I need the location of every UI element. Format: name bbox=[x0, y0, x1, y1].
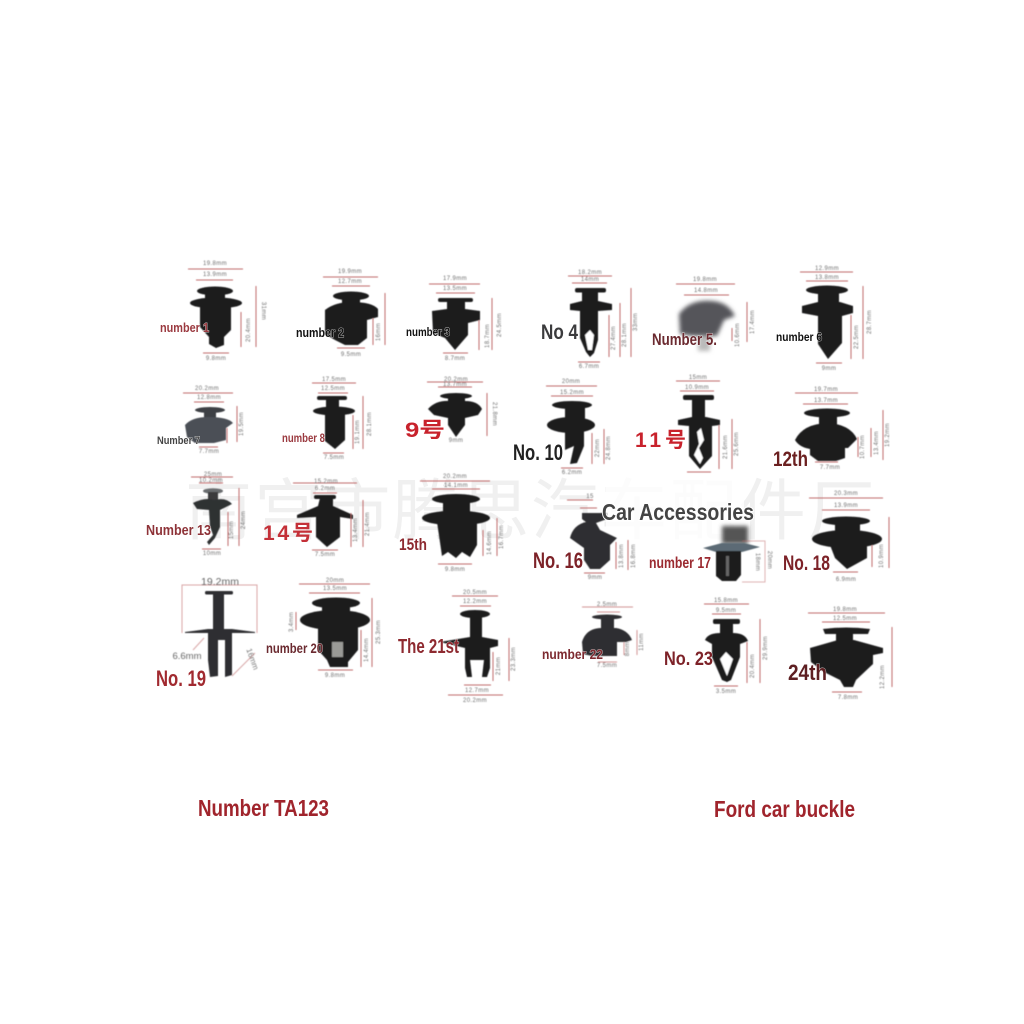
label: Car Accessories: Car Accessories bbox=[602, 499, 754, 525]
clip 20: 25.3mm bbox=[376, 620, 382, 644]
clip 3: 17.9mm bbox=[443, 276, 467, 282]
watermark: 南宫市腾思汽车配件厂 bbox=[185, 474, 875, 549]
clip 21: 20.5mm bbox=[463, 590, 487, 596]
clip 3: 18.7mm bbox=[485, 324, 491, 348]
label: 24th: 24th bbox=[788, 660, 827, 685]
clip 3: 24.5mm bbox=[497, 313, 503, 337]
clip 22 bbox=[542, 602, 645, 669]
clip 7 bbox=[157, 386, 245, 455]
clip 13 bbox=[146, 472, 247, 557]
label: number 2: number 2 bbox=[296, 325, 344, 340]
clip 15: 14.6mm bbox=[487, 531, 493, 555]
clip 3: 8.7mm bbox=[445, 356, 465, 362]
clip 21: 12.7mm bbox=[465, 688, 489, 694]
label: Number 13: Number 13 bbox=[146, 522, 211, 539]
clip 11: 15mm bbox=[689, 375, 707, 381]
clip 2: 19.9mm bbox=[338, 269, 362, 275]
clip 10: 15.2mm bbox=[560, 390, 584, 396]
label: 14号: 14号 bbox=[263, 522, 313, 545]
clip 22: 8mm bbox=[625, 642, 631, 656]
label: No. 16: No. 16 bbox=[533, 548, 583, 573]
clip 24: 12.2mm bbox=[880, 665, 886, 689]
clip 5: 19.8mm bbox=[693, 277, 717, 283]
clip 23: 9.5mm bbox=[716, 608, 736, 614]
clip 12: 10.7mm bbox=[860, 435, 866, 459]
clip 15 bbox=[399, 474, 505, 573]
clip 11: 21.6mm bbox=[723, 435, 729, 459]
clip 19: 16mm bbox=[244, 647, 260, 671]
clip 1: 31mm bbox=[260, 302, 266, 320]
clip 20: 3.4mm bbox=[289, 612, 295, 632]
clip 3 bbox=[406, 276, 503, 362]
clip 14: 7.5mm bbox=[315, 552, 335, 558]
label: number 1: number 1 bbox=[160, 320, 209, 335]
clip 21: 20.2mm bbox=[463, 698, 487, 704]
clip 1: 19.8mm bbox=[203, 261, 227, 267]
clip 18: 6.9mm bbox=[836, 577, 856, 583]
clip 6: 22.5mm bbox=[854, 325, 860, 349]
clip 18: 10.9mm bbox=[879, 544, 885, 568]
clip 5 bbox=[652, 277, 756, 351]
clip 20: 20mm bbox=[326, 578, 344, 584]
label: No. 18: No. 18 bbox=[783, 552, 830, 575]
clip 16: 15 bbox=[586, 494, 594, 500]
clip 11: 25.6mm bbox=[734, 432, 740, 456]
clip 6 bbox=[776, 266, 873, 372]
clip 12 bbox=[773, 387, 891, 471]
clip 24: 12.5mm bbox=[833, 616, 857, 622]
clip 23: 15.8mm bbox=[714, 598, 738, 604]
label: No. 23: No. 23 bbox=[664, 649, 713, 670]
clip 20: 13.5mm bbox=[323, 586, 347, 592]
caption: Number TA123: Number TA123 bbox=[198, 795, 329, 821]
label: 11号: 11号 bbox=[635, 429, 686, 452]
clip 20: 14.4mm bbox=[364, 638, 370, 662]
clip 6: 12.9mm bbox=[815, 266, 839, 272]
clip 21: 23.3mm bbox=[511, 647, 517, 671]
clip 12: 19.2mm bbox=[885, 423, 891, 447]
clip 17: 20mm bbox=[766, 551, 772, 569]
clip 15: 9.8mm bbox=[445, 567, 465, 573]
clip 8: 12.5mm bbox=[321, 386, 345, 392]
clip 10: 6.2mm bbox=[562, 470, 582, 476]
clip 24 bbox=[788, 607, 892, 701]
label: No. 19: No. 19 bbox=[156, 666, 206, 691]
label: Number 5.: Number 5. bbox=[652, 330, 717, 349]
clip 22: 11mm bbox=[639, 633, 645, 651]
clip 4: 14mm bbox=[581, 277, 599, 283]
clip 6: 13.8mm bbox=[815, 275, 839, 281]
clip 14: 21.4mm bbox=[365, 512, 371, 536]
clip 9 bbox=[405, 377, 497, 444]
label: number 8: number 8 bbox=[282, 431, 325, 445]
clip 11: 10.9mm bbox=[685, 385, 709, 391]
clip 18 bbox=[783, 491, 889, 583]
clip 2: 16mm bbox=[376, 323, 382, 341]
clip 11 bbox=[635, 375, 740, 472]
clip 1: 20.4mm bbox=[246, 318, 252, 342]
clip 10: 20mm bbox=[562, 379, 580, 385]
clip 22: 7.5mm bbox=[597, 663, 617, 669]
clip 13: 24mm bbox=[241, 511, 247, 529]
clip 4: 6.7mm bbox=[579, 364, 599, 370]
clip 9: 21.8mm bbox=[491, 402, 497, 426]
clip 24: 19.8mm bbox=[833, 607, 857, 613]
clip 15: 16.7mm bbox=[499, 525, 505, 549]
clip 17: 18mm bbox=[754, 553, 760, 571]
clip 23: 3.5mm bbox=[716, 689, 736, 695]
clip 14: 13.4mm bbox=[353, 518, 359, 542]
clip 21: 12.2mm bbox=[463, 599, 487, 605]
clip 16 bbox=[533, 494, 637, 581]
clip 23: 29.9mm bbox=[763, 636, 769, 660]
label: number 22: number 22 bbox=[542, 646, 603, 662]
clip 13: 15mm bbox=[229, 521, 235, 539]
clip 7: 20.2mm bbox=[195, 386, 219, 392]
clip 22: 2.5mm bbox=[597, 602, 617, 608]
clip 4: 28.1mm bbox=[622, 323, 628, 347]
label: number 20: number 20 bbox=[266, 640, 323, 656]
clip 8: 28.1mm bbox=[367, 412, 373, 436]
clip 23 bbox=[664, 598, 769, 695]
clip 3: 13.5mm bbox=[443, 286, 467, 292]
clip 15: 14.1mm bbox=[444, 483, 468, 489]
clip 16: 16.8mm bbox=[631, 544, 637, 568]
clip 6: 9mm bbox=[822, 366, 836, 372]
clip 4: 27.4mm bbox=[611, 326, 617, 350]
clip 19 bbox=[156, 577, 260, 691]
clip 12: 13.7mm bbox=[814, 398, 838, 404]
label: number 6: number 6 bbox=[776, 330, 822, 344]
clip 10 bbox=[513, 379, 612, 476]
clip 7: 7.7mm bbox=[199, 449, 219, 455]
clip 21: 21mm bbox=[496, 657, 502, 675]
label: 15th: 15th bbox=[399, 535, 427, 554]
clip 8: 7.5mm bbox=[324, 455, 344, 461]
label: The 21st: The 21st bbox=[398, 636, 459, 658]
clip 8: 19.1mm bbox=[355, 420, 361, 444]
clip 1 bbox=[160, 261, 266, 362]
clip 6: 28.7mm bbox=[867, 310, 873, 334]
clip 2 bbox=[296, 269, 385, 358]
clip 2: 12.7mm bbox=[338, 279, 362, 285]
clip 13: 25mm bbox=[204, 472, 222, 478]
clip 15: 20.2mm bbox=[443, 474, 467, 480]
clip 17 bbox=[649, 526, 772, 582]
clip 4 bbox=[541, 270, 639, 370]
clip 19: 6.6mm bbox=[172, 651, 202, 662]
clip 12: 13.4mm bbox=[874, 431, 880, 455]
clip 4: 18.2mm bbox=[578, 270, 602, 276]
clip 16: 13.8mm bbox=[619, 544, 625, 568]
clip 20 bbox=[266, 578, 382, 679]
clip 5: 14.8mm bbox=[694, 288, 718, 294]
label: No 4: No 4 bbox=[541, 321, 578, 344]
clip 16: 9mm bbox=[588, 575, 602, 581]
clip 1: 9.8mm bbox=[206, 356, 226, 362]
clip 20: 9.8mm bbox=[325, 673, 345, 679]
clip 13: 10.2mm bbox=[199, 478, 223, 484]
label: 9号: 9号 bbox=[405, 419, 445, 442]
clip 7: 19.5mm bbox=[239, 412, 245, 436]
clip 12: 7.7mm bbox=[820, 465, 840, 471]
clip 14: 6.2mm bbox=[315, 486, 335, 492]
clip 5: 17.4mm bbox=[750, 310, 756, 334]
clip 9: 13.7mm bbox=[443, 382, 467, 388]
clip 8: 17.5mm bbox=[322, 377, 346, 383]
clip 10: 22mm bbox=[595, 439, 601, 457]
clip 18: 20.3mm bbox=[834, 491, 858, 497]
clip 24: 7.8mm bbox=[838, 695, 858, 701]
clip 18: 13.9mm bbox=[834, 503, 858, 509]
clip 23: 20.4mm bbox=[750, 654, 756, 678]
clip 2: 9.5mm bbox=[341, 352, 361, 358]
clip 4: 33mm bbox=[633, 313, 639, 331]
clip 9: 20.2mm bbox=[444, 377, 468, 383]
clip 19: 19.2mm bbox=[201, 577, 239, 588]
clip 8 bbox=[282, 377, 373, 461]
caption: Ford car buckle: Ford car buckle bbox=[714, 796, 855, 822]
clip 14 bbox=[263, 479, 371, 558]
label: number 3: number 3 bbox=[406, 325, 450, 339]
clip 9: 9mm bbox=[449, 438, 463, 444]
clip 14: 15.2mm bbox=[314, 479, 338, 485]
clip 1: 13.9mm bbox=[203, 272, 227, 278]
clip 5: 10.6mm bbox=[735, 323, 741, 347]
clip 7: 12.8mm bbox=[197, 395, 221, 401]
clip 12: 19.7mm bbox=[814, 387, 838, 393]
clip 10: 24.8mm bbox=[606, 436, 612, 460]
clip 13: 10mm bbox=[203, 551, 221, 557]
label: 12th: 12th bbox=[773, 448, 808, 471]
label: No. 10: No. 10 bbox=[513, 440, 563, 465]
label: Number 7: Number 7 bbox=[157, 435, 200, 447]
label: number 17: number 17 bbox=[649, 555, 711, 572]
clip 21 bbox=[398, 590, 517, 704]
